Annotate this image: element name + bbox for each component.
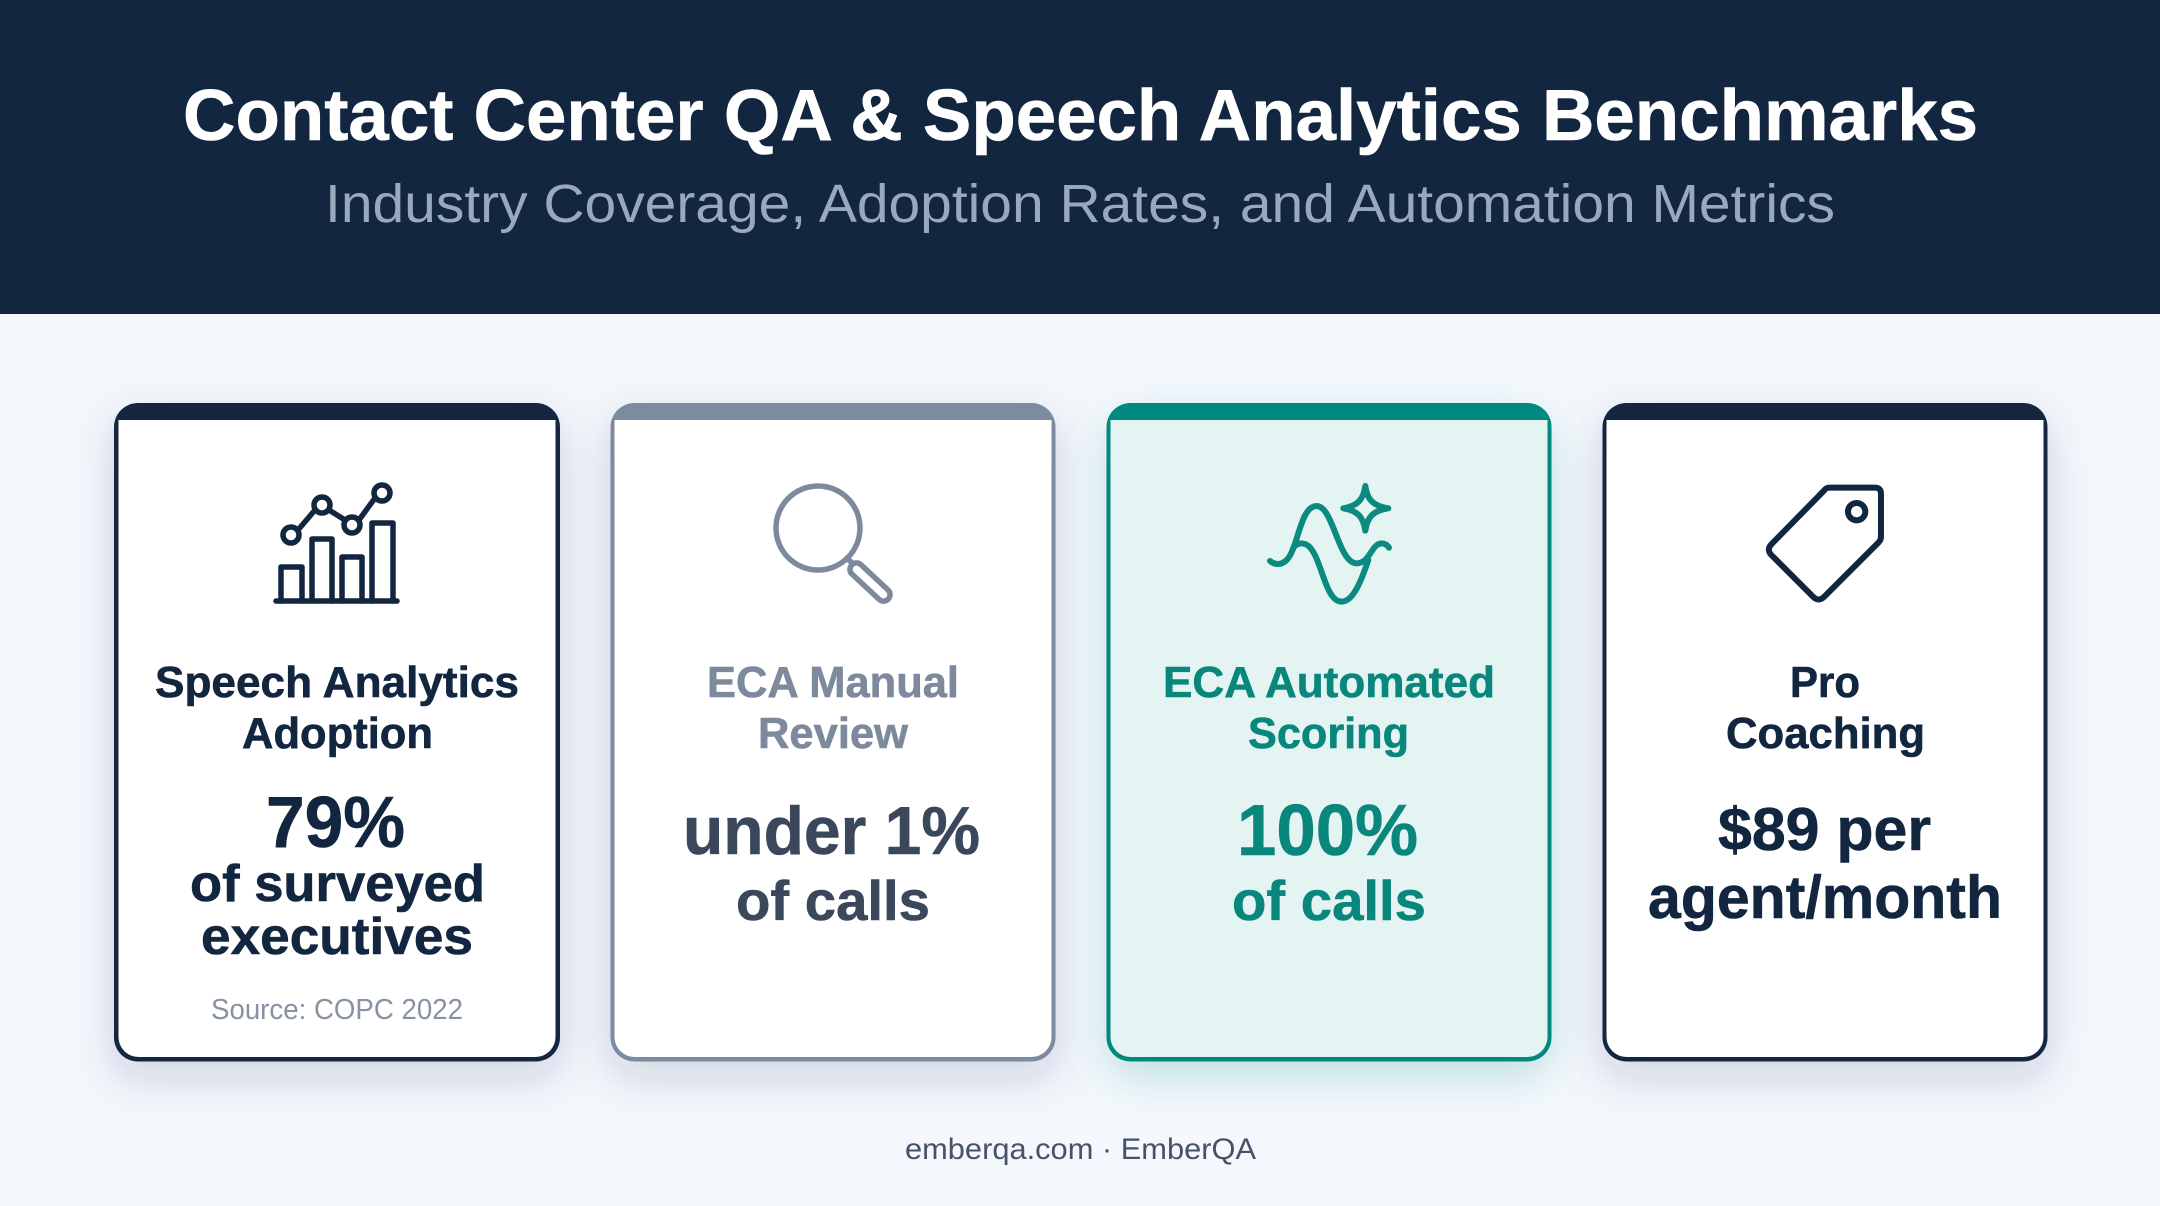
metric value: [190, 783, 485, 966]
icon: waveform with sparkle: [1270, 486, 1389, 602]
icon: bar chart with trend line: [276, 485, 397, 601]
panel: ECA automated scoring: [1106, 403, 1552, 1062]
card title: ECA Automated: [1163, 658, 1495, 707]
card title: [155, 658, 519, 758]
metric value: $89 per: [1718, 796, 1931, 863]
panel: pro coaching: [1602, 403, 2048, 1062]
panel: speech analytics adoption: [114, 403, 560, 1062]
card title: Speech Analytics: [155, 658, 519, 707]
metric value: [1232, 791, 1426, 932]
header band: [0, 0, 2160, 314]
footer: emberqa.com · EmberQA: [905, 1133, 1256, 1166]
metric value: 79%: [266, 783, 405, 863]
icon: magnifying glass: [776, 486, 893, 604]
source note: Source: COPC 2022: [211, 994, 463, 1026]
card title: ECA Manual: [707, 658, 959, 707]
card title: Coaching: [1726, 709, 1925, 758]
card title: [1726, 658, 1925, 758]
metric value: of calls: [1232, 869, 1426, 932]
card title: Scoring: [1248, 709, 1409, 758]
card title: [1163, 658, 1495, 758]
metric value: of surveyed: [190, 855, 485, 913]
card title: [707, 658, 959, 758]
card title: Adoption: [242, 709, 433, 758]
metric value: under 1%: [683, 793, 980, 869]
metric value: 100%: [1237, 791, 1418, 871]
subtitle: Industry Coverage, Adoption Rates, and Automation Metrics: [325, 174, 1835, 234]
panel: ECA manual review: [610, 403, 1056, 1062]
metric value: [683, 793, 980, 932]
metric value: [1648, 796, 2002, 931]
title: Contact Center QA & Speech Analytics Benchmarks: [183, 76, 1978, 156]
card title: Pro: [1790, 658, 1860, 707]
card title: Review: [758, 709, 909, 758]
metric value: agent/month: [1648, 864, 2002, 931]
metric value: of calls: [736, 869, 930, 932]
icon: price tag: [1769, 488, 1881, 599]
metric value: executives: [201, 908, 473, 966]
